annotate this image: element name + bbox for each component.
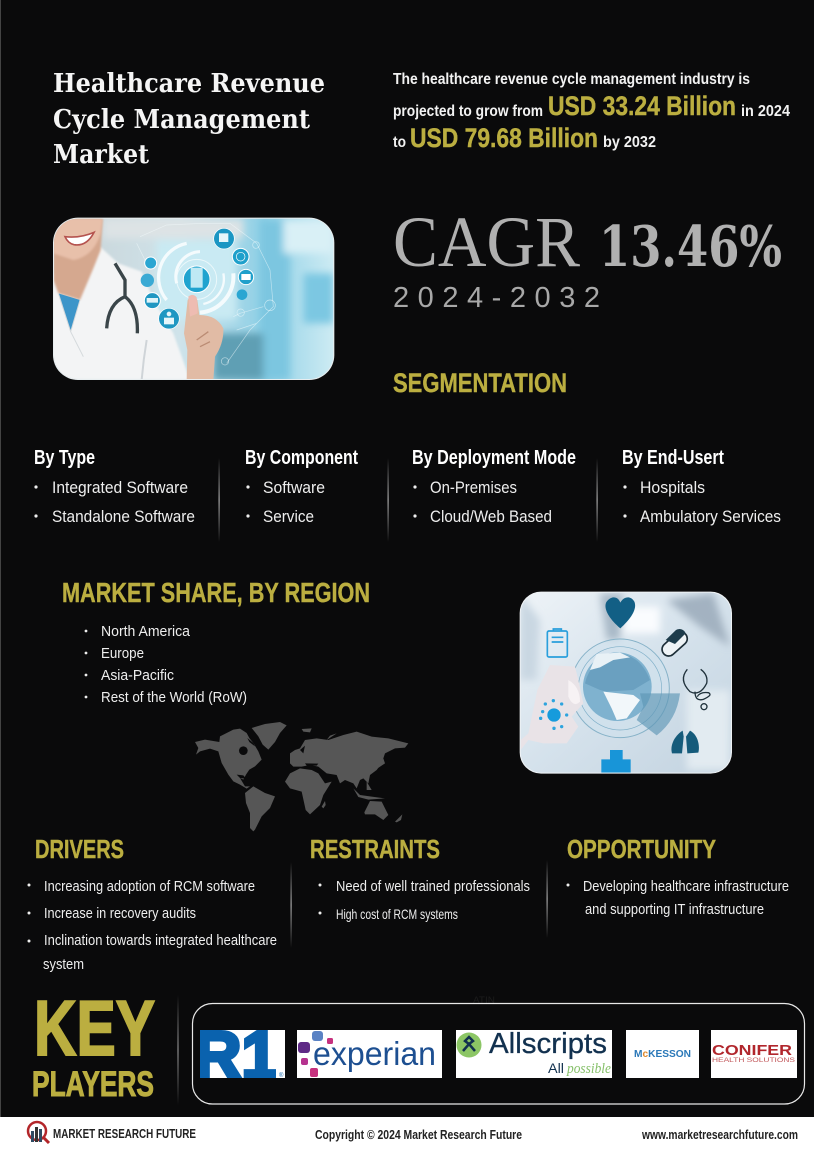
market size summary: to [393,134,406,151]
restraints list: High cost of RCM systems [336,906,458,922]
logo: Allscripts: possible [566,1061,611,1077]
logo: R1: R1 [194,1018,278,1093]
heading: drivers: DRIVERS [35,834,124,864]
gloved hand [521,665,583,750]
title: Healthcare Revenue [53,69,325,99]
segmentation: by deployment mode: On-Premises [430,478,517,497]
logo: McKesson [626,1030,699,1078]
doctor figure [50,219,190,380]
segmentation: by end user: Ambulatory Services [640,507,781,526]
holographic interface [137,223,275,365]
logo: Conifer: CONIFER [712,1043,793,1059]
market size summary: USD 33.24 Billion [548,91,736,121]
icon: heart [605,597,635,628]
faint stamp: ATIN [473,995,495,1005]
market size summary: USD 79.68 Billion [410,123,598,153]
heading: segmentation: SEGMENTATION [393,368,567,398]
region list: Asia-Pacific [101,667,174,684]
opportunity list [566,878,789,918]
market size summary: in 2024 [741,103,790,120]
heading: key players: PLAYERS [32,1065,154,1104]
pointing hand [184,296,223,380]
logo: Experian: experian [313,1035,436,1072]
heading: key players [32,984,155,1104]
segmentation: by end user [622,447,781,526]
logo: Allscripts [456,1028,612,1078]
segmentation: by end user: Hospitals [640,478,705,497]
footer [0,1117,814,1150]
segmentation: by deployment mode [412,447,576,526]
title: Market [53,140,149,170]
segmentation: by type: Standalone Software [52,507,195,526]
market size summary: by 2032 [603,134,656,151]
drivers list: Increasing adoption of RCM software [44,878,255,895]
logo: Experian [297,1030,442,1078]
drivers list: Increase in recovery audits [44,905,196,922]
segmentation: by component: Software [263,478,325,497]
logo: Market Research Future: MARKET RESEARCH FUTURE [53,1126,196,1141]
region list: North America [101,623,191,640]
logo: Conifer [711,1030,797,1078]
market size summary [393,71,790,153]
region list: Rest of the World (RoW) [101,689,247,706]
heading: key players: KEY [34,984,155,1072]
logo: R1: ® [279,1072,284,1079]
segmentation: by type: By Type [34,447,95,469]
heading: market share by region: MARKET SHARE, BY REGION [62,577,370,608]
icon: stethoscope [683,669,710,710]
segmentation: by deployment mode: Cloud/Web Based [430,507,552,526]
icon: clipboard [547,629,567,657]
drivers list [28,878,277,973]
market size summary: projected to grow from [393,103,543,120]
restraints list: Need of well trained professionals [336,878,530,895]
globe [571,639,680,738]
heading: restraints: RESTRAINTS [310,834,440,864]
photo: doctor touching healthcare interface [50,218,334,380]
photo: hand holding globe with medical icons [520,592,732,774]
CAGR figure: 2024-2032 [393,282,600,314]
segmentation: by component: By Component [245,447,358,469]
logo: Allscripts: All [548,1060,564,1076]
restraints list [318,878,530,922]
key players panel [192,1004,804,1104]
drivers list: Inclination towards integrated healthcare [44,932,277,949]
logo: Conifer: HEALTH SOLUTIONS [712,1058,795,1064]
CAGR figure [393,202,782,314]
drivers list: system [43,956,84,973]
icon: pill [661,629,688,657]
opportunity list: and supporting IT infrastructure [585,901,764,918]
segmentation: by component [245,447,358,526]
CAGR figure: CAGR [393,202,580,282]
icon: lungs [671,731,699,753]
segmentation: by deployment mode: By Deployment Mode [412,447,576,469]
market size summary: The healthcare revenue cycle management industry is [393,71,750,88]
region list: Europe [101,645,144,662]
segmentation: by component: Service [263,507,314,526]
segmentation: by type: Integrated Software [52,478,188,497]
region list [85,623,247,706]
logo: R1 [200,1030,285,1078]
logo: Market Research Future [28,1122,196,1143]
logo: Allscripts: Allscripts [489,1028,607,1060]
world map [195,722,408,831]
icon: medical cross [601,750,631,773]
segmentation: by end user: By End-Usert [622,447,724,469]
title [53,69,325,170]
title: Cycle Management [53,105,310,135]
logo: McKesson: McKESSON [634,1048,691,1060]
segmentation: by type [34,447,195,526]
heading: opportunity: OPPORTUNITY [567,834,716,864]
copyright: Copyright © 2024 Market Research Future [315,1127,522,1142]
